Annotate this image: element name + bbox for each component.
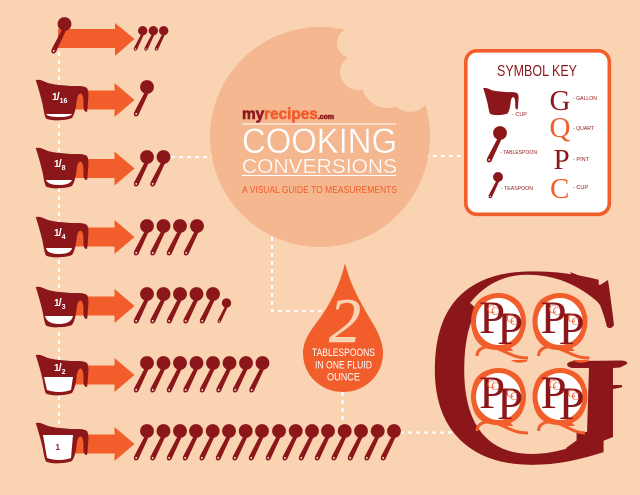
fill level (46, 114, 72, 117)
spoons (134, 219, 204, 256)
quart 3: C (491, 379, 499, 393)
icon: cup: 2 (62, 369, 66, 376)
title rule top (242, 124, 396, 125)
key heading: SYMBOL KEY (497, 63, 577, 80)
quart 4: P (558, 378, 585, 430)
fraction: 1/ (52, 91, 60, 103)
quart 4: Q (530, 350, 590, 443)
title: cooking: COOKING (242, 122, 397, 161)
quart 2: C (568, 311, 576, 325)
row: 1/3 cup (36, 287, 231, 327)
logo: myrecipes.com (242, 106, 334, 123)
icon: cup: 1/ (54, 158, 62, 170)
quart 1: C (506, 311, 514, 325)
key: teaspoon: - TEASPOON (501, 186, 533, 192)
quart 1: C (491, 304, 499, 318)
quart 1: P (479, 292, 505, 344)
icon: cup (36, 287, 88, 327)
quart 4: C (548, 377, 557, 391)
quart 3: P (497, 378, 523, 430)
key: pint (554, 144, 590, 176)
icon: cup: 1/ (54, 227, 62, 239)
quart 1: C (510, 314, 518, 328)
quart 2: P (558, 303, 585, 355)
spoons (134, 80, 154, 116)
spoons (134, 356, 269, 392)
quart 2: C (572, 314, 580, 328)
quart 2: C (552, 304, 561, 318)
key: tablespoon (487, 126, 537, 162)
spoons (134, 287, 231, 324)
drop text: TABLESPOONS (312, 347, 375, 359)
quart 1: P (497, 303, 523, 355)
arrow (58, 23, 134, 56)
key: pint: P (554, 144, 570, 176)
icon: cup: 1 (56, 443, 60, 452)
quart 3: C (506, 386, 514, 400)
drop callout: IN ONE FLUID (315, 360, 372, 372)
arrow (60, 427, 134, 461)
arrow (60, 83, 134, 117)
key: cup letter: - CUP (573, 185, 588, 191)
row: 1/2 cup (36, 355, 269, 395)
quart 3: C (487, 377, 495, 391)
number 2: 2 (329, 285, 361, 356)
icon: cup: 8 (62, 165, 66, 172)
key: quart: - QUART (573, 126, 595, 132)
quart 1: Q (468, 275, 529, 368)
dashed connector lines (59, 52, 465, 440)
quart 4: P (540, 367, 567, 419)
arrow (60, 358, 134, 392)
key: gallon: - GALLON (573, 96, 597, 102)
arrow (60, 152, 134, 186)
key: tablespoon: - TABLESPOON (500, 150, 537, 156)
key: gallon: G (550, 85, 570, 117)
quart 3: Q (468, 350, 529, 443)
key: gallon (550, 85, 597, 117)
quart 2: Q (530, 275, 590, 368)
icon: cup (36, 423, 88, 463)
gallon graphic (434, 271, 628, 465)
row: 1/8 cup (36, 148, 170, 188)
row: 1/16 cup (36, 80, 154, 120)
subtitle: A VISUAL GUIDE TO MEASUREMENTS (242, 184, 397, 196)
key: teaspoon (489, 172, 533, 198)
spoons (134, 424, 401, 460)
drop callout: OUNCE (327, 372, 360, 384)
icon: cup: 1/ (54, 297, 62, 309)
icon: cup (36, 355, 88, 395)
panel: symbol key (466, 51, 609, 214)
title circle with bite (210, 10, 445, 247)
quart 3: C (510, 389, 518, 403)
quart 4: C (552, 379, 561, 393)
teaspoons (134, 26, 168, 51)
key: cup (483, 88, 527, 118)
drop callout (303, 263, 383, 392)
arrow (60, 289, 134, 323)
key: pint: - PINT (573, 157, 590, 163)
key: quart: Q (550, 112, 570, 144)
spoons (134, 150, 170, 186)
title rule bottom (242, 175, 396, 176)
icon: cup: 4 (62, 234, 66, 241)
quart 4: C (568, 386, 576, 400)
title: conversions: CONVERSIONS (242, 156, 397, 178)
quart 3: P (479, 367, 505, 419)
key: cup letter (550, 173, 588, 205)
quart 3 (471, 368, 528, 434)
quart 4 (532, 368, 588, 434)
key: cup: - CUP (512, 112, 527, 118)
fraction: 16 (60, 98, 68, 105)
quart 2: P (540, 292, 567, 344)
arrow (60, 220, 134, 254)
row: tablespoon to teaspoons (51, 17, 168, 56)
key: quart (550, 112, 595, 144)
icon: cup: 3 (62, 304, 66, 311)
quart 1: C (487, 302, 495, 316)
row: 1/4 cup (36, 217, 204, 257)
icon: cup: 1/ (54, 362, 62, 374)
icon: cup (36, 80, 88, 120)
icon: tablespoon (51, 17, 71, 54)
quart 2: C (548, 302, 557, 316)
icon: cup (36, 148, 88, 188)
key: cup letter: C (550, 173, 569, 205)
G shape adjustments (470, 272, 630, 455)
quart 4: C (572, 389, 580, 403)
icon: cup (36, 217, 88, 257)
row: 1 cup (36, 423, 401, 463)
